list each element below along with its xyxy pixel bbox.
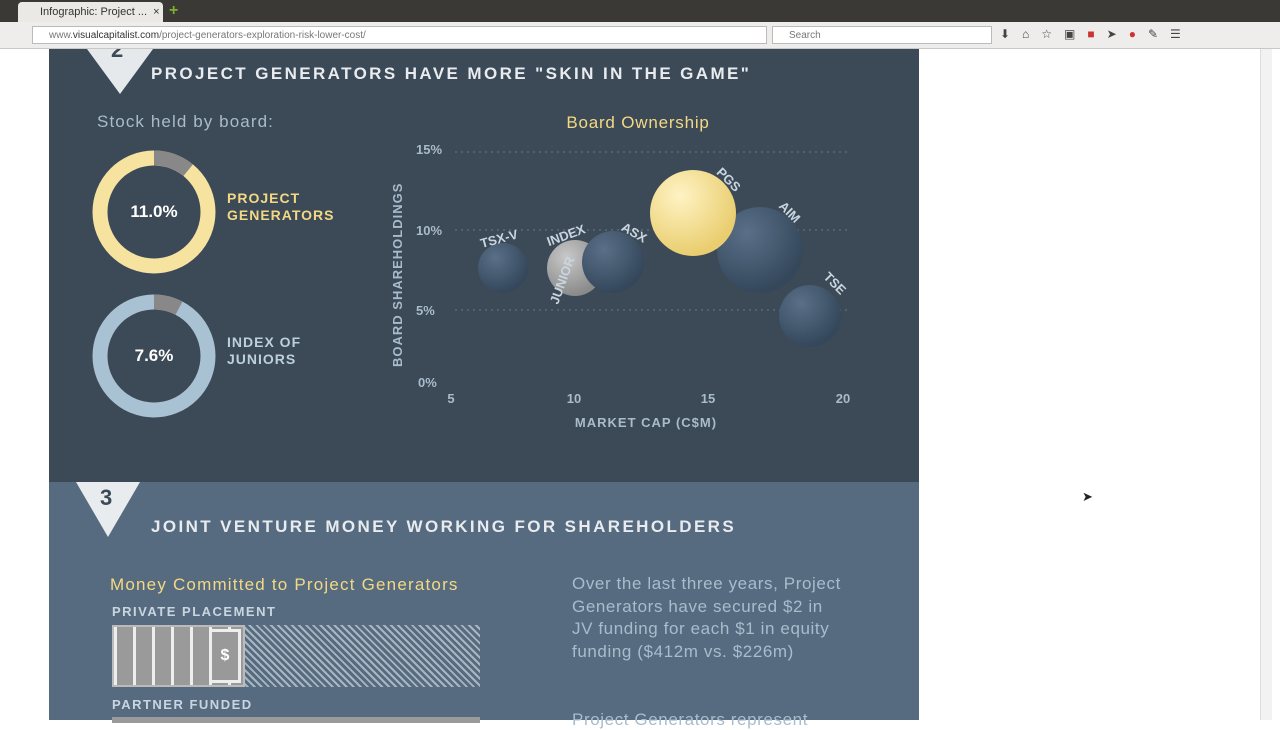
browser tab bar <box>0 0 1280 22</box>
panel: section 2 skin in the game <box>49 49 919 482</box>
bubble chart: board ownership: PGS <box>714 165 744 195</box>
heading: JOINT VENTURE MONEY WORKING FOR SHAREHOLDERS <box>151 517 736 536</box>
tab <box>18 2 163 22</box>
subheading: money committed: Money Committed to Project Generators <box>110 575 459 594</box>
donut: project generators <box>92 150 216 274</box>
donut: project generators: 11.0% <box>130 202 178 221</box>
label: index of juniors <box>227 334 301 367</box>
bubble chart: board ownership: JUNIOR <box>547 254 578 306</box>
section number triangle <box>87 49 153 94</box>
panel: section 3 joint venture: 3 <box>100 485 112 510</box>
text: JV funding statement: funding ($412m vs. $226m) <box>572 642 794 660</box>
bubble chart: board ownership: 20 <box>836 391 850 406</box>
bubble chart: board ownership: TSE <box>821 269 849 298</box>
bubble chart: board ownership: MARKET CAP (C$M) <box>575 415 717 430</box>
icon: money bills <box>112 625 245 687</box>
bubble chart: board ownership: 10% <box>416 223 442 238</box>
url bar <box>32 26 767 44</box>
label: index of juniors: INDEX OF <box>227 334 301 350</box>
label: private placement: PRIVATE PLACEMENT <box>112 604 276 619</box>
bubble chart: board ownership: 15% <box>416 142 442 157</box>
donut: index of juniors: 7.6% <box>135 346 173 365</box>
search box: Search <box>789 30 821 41</box>
bubble chart: board ownership: BOARD SHAREHOLDINGS <box>390 183 405 367</box>
cursor: ➤ <box>1082 489 1093 504</box>
label: index of juniors: JUNIORS <box>227 351 296 367</box>
panel: section 3 joint venture: Project Generators represent <box>572 710 808 729</box>
scrollbar <box>1260 49 1272 720</box>
heading: PROJECT GENERATORS HAVE MORE "SKIN IN THE GAME" <box>151 64 751 83</box>
bubble chart: board ownership: 0% <box>418 375 437 390</box>
url bar: www.visualcapitalist.com/project-generators-exploration-risk-lower-cost/ <box>49 30 366 41</box>
bubble chart: board ownership: INDEX <box>545 221 588 249</box>
text: JV funding statement <box>572 574 841 660</box>
section number triangle <box>76 482 140 537</box>
tab: Infographic: Project ... × <box>40 6 160 18</box>
text: JV funding statement: Over the last three years, Project <box>572 574 841 593</box>
label: project generators: PROJECT <box>227 190 300 206</box>
bubble chart: board ownership: TSX-V <box>479 226 520 251</box>
text: JV funding statement: Generators have secured $2 in <box>572 596 823 616</box>
bubble chart: board ownership: Board Ownership <box>566 113 710 132</box>
bubble chart: board ownership: 15 <box>701 391 715 406</box>
label: project generators <box>227 190 334 223</box>
bar: private placement: $ <box>221 647 229 664</box>
panel: section 3 joint venture <box>49 482 919 720</box>
bubble chart: board ownership <box>390 113 850 430</box>
label: partner funded: PARTNER FUNDED <box>112 697 253 712</box>
search box <box>772 26 992 44</box>
new tab icon: + <box>169 2 178 19</box>
donut: index of juniors <box>92 294 216 418</box>
toolbar icons: ⬇⌂☆▣■➤●✎☰ <box>1000 27 1193 41</box>
bubble chart: board ownership: 5% <box>416 303 435 318</box>
browser toolbar <box>0 22 1280 49</box>
label: project generators: GENERATORS <box>227 207 334 223</box>
bubble chart: board ownership: AIM <box>776 198 803 226</box>
text: JV funding statement: JV funding for each $1 in equity <box>572 619 829 638</box>
bubble chart: board ownership: ASX <box>619 219 650 246</box>
bubble chart: board ownership: 10 <box>567 391 581 406</box>
bar: private placement <box>112 625 480 687</box>
bubble chart: board ownership: 5 <box>447 391 455 406</box>
subheading: stock held by board: Stock held by board: <box>97 112 274 131</box>
